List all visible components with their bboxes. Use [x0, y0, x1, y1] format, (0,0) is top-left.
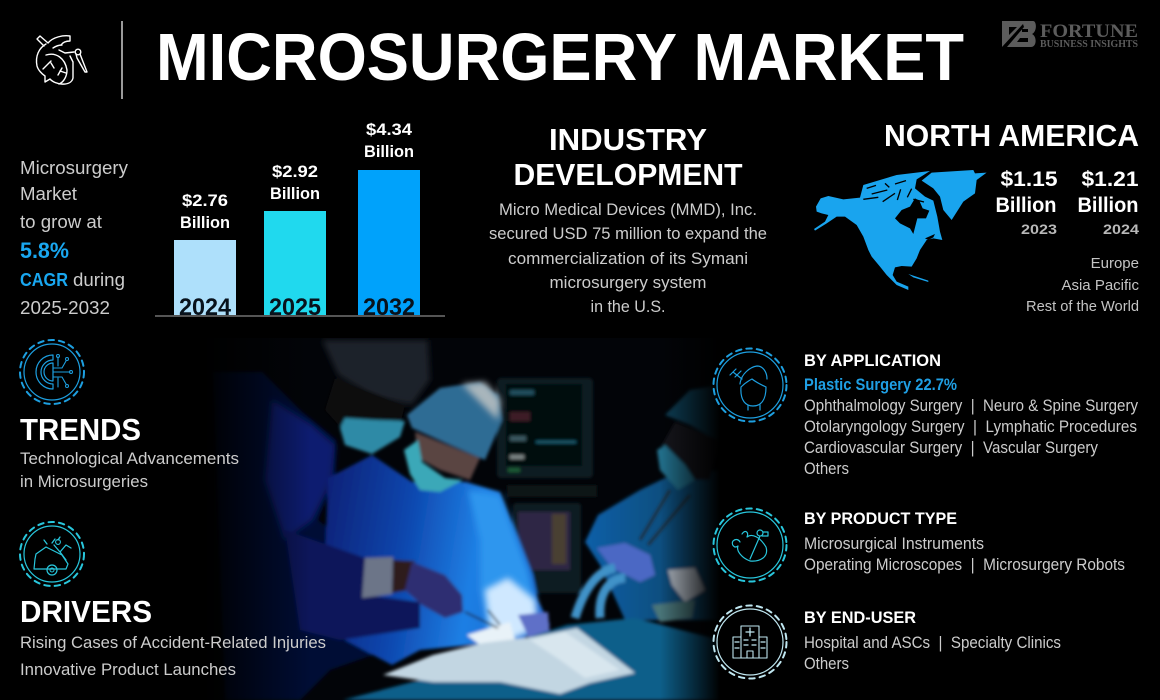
end-user list: Hospital and ASCs | Specialty Clinics: [804, 633, 1061, 652]
white glove: [668, 568, 705, 602]
forearm skin: [392, 560, 415, 593]
north america values: 2024: [1103, 221, 1139, 237]
north america values: Billion: [1078, 194, 1138, 217]
header divider: [121, 21, 123, 99]
icon: application face with syringe: [714, 348, 786, 422]
north america values: $1.15: [1000, 168, 1058, 191]
drivers text: Rising Cases of Accident-Related Injuries: [20, 633, 326, 652]
north america values: [996, 168, 1139, 237]
icon: drivers car accident: [20, 522, 84, 586]
product type list: [804, 534, 1125, 574]
growth text block: [20, 157, 129, 318]
tubes: [575, 568, 625, 618]
growth text block: Microsurgery: [20, 157, 129, 178]
bar chart: 2032: [363, 294, 415, 321]
end-user list: Others: [804, 654, 849, 673]
left surgeon cap: [322, 340, 430, 405]
growth text block: Market: [20, 183, 77, 204]
trends text: [20, 449, 239, 491]
logo: Fortune Business Insights: [1002, 21, 1138, 50]
north america values: Billion: [996, 194, 1056, 217]
industry development: commercialization of its Symani: [508, 249, 748, 268]
logo: Fortune Business Insights: BUSINESS INSIGHTS: [1040, 39, 1138, 50]
instruments: [465, 610, 500, 628]
industry development: INDUSTRY: [549, 122, 707, 157]
growth text block: during: [73, 269, 125, 290]
by product type heading: BY PRODUCT TYPE: [804, 509, 957, 528]
industry development: Micro Medical Devices (MMD), Inc.: [499, 200, 757, 219]
stethoscope: [640, 490, 690, 545]
background photo: surgeons in operating room: [200, 338, 720, 700]
bar chart: $2.76: [182, 191, 228, 210]
other regions: Europe: [1091, 255, 1139, 272]
bar chart: 2024: [179, 294, 232, 321]
nurse cap: [664, 387, 714, 436]
drivers text: [20, 633, 326, 679]
icon: product type heart with instrument: [714, 508, 786, 582]
north america heading: NORTH AMERICA: [884, 118, 1139, 153]
industry development: in the U.S.: [590, 297, 666, 316]
header icon: heart with scalpel: [36, 36, 87, 84]
product type list: Microsurgical Instruments: [804, 534, 984, 553]
growth text block: CAGR: [20, 269, 68, 290]
center surgeon cap: [407, 382, 502, 460]
center surgeon face: [415, 432, 480, 480]
trends text: in Microsurgeries: [20, 472, 148, 491]
bar chart: Billion: [364, 142, 414, 161]
application list: [804, 375, 1138, 478]
left surgeon face: [325, 378, 405, 432]
bright sleeve: [468, 490, 535, 640]
trends heading: TRENDS: [20, 412, 141, 447]
by application heading: BY APPLICATION: [804, 351, 941, 370]
logo: Fortune Business Insights: FORTUNE: [1040, 21, 1138, 42]
trends text: Technological Advancements: [20, 449, 239, 468]
icon: end-user hospital: [714, 606, 786, 678]
map: North America: [814, 170, 987, 290]
drivers text: Innovative Product Launches: [20, 660, 236, 679]
north america values: 2023: [1021, 221, 1057, 237]
by end-user heading: BY END-USER: [804, 608, 916, 627]
drivers heading: DRIVERS: [20, 594, 152, 629]
industry development: [489, 122, 767, 316]
white drape: [383, 628, 635, 694]
other regions: Asia Pacific: [1061, 277, 1139, 294]
title: MICROSURGERY MARKET: [156, 20, 964, 95]
glove: [405, 562, 463, 618]
right fade: [664, 382, 720, 700]
left surgeon body: [220, 372, 373, 700]
application list: Cardiovascular Surgery | Vascular Surgery: [804, 438, 1098, 457]
left surgeon arm: [285, 530, 420, 640]
other regions: [1026, 255, 1139, 315]
bar chart: $2.92: [272, 162, 318, 181]
industry development: DEVELOPMENT: [514, 157, 743, 192]
application list: Others: [804, 459, 849, 478]
left surgeon shoulder: [265, 400, 335, 540]
oxygen mask: [652, 600, 695, 622]
growth text block: 2025-2032: [20, 297, 110, 318]
end-user list: [804, 633, 1061, 673]
nurse face: [662, 422, 710, 480]
patient blue drape: [343, 618, 720, 700]
bar chart: [155, 120, 445, 321]
product type list: Operating Microscopes | Microsurgery Robots: [804, 555, 1125, 574]
bar chart: 2025: [269, 294, 321, 321]
left fade: [210, 370, 302, 700]
icon: trends gear circuit: [20, 340, 84, 404]
application list: Plastic Surgery 22.7%: [804, 375, 957, 394]
monitor upper: [497, 378, 597, 497]
cuff: [362, 557, 393, 598]
nurse glove: [597, 543, 655, 582]
nurse body: [585, 470, 720, 620]
bar chart: Billion: [180, 213, 230, 232]
gauze: [467, 622, 515, 645]
industry development: microsurgery system: [550, 273, 706, 292]
industry development: secured USD 75 million to expand the: [489, 224, 767, 243]
nurse mask: [657, 445, 695, 490]
center surgeon mask: [404, 440, 463, 492]
growth text block: 5.8%: [20, 238, 69, 263]
center surgeon gown: [325, 455, 550, 665]
north america values: $1.21: [1082, 168, 1139, 191]
bar chart: Billion: [270, 184, 320, 203]
center glove: [518, 612, 550, 640]
growth text block: to grow at: [20, 211, 102, 232]
left surgeon mask: [340, 418, 405, 454]
bar chart: $4.34: [366, 120, 413, 139]
other regions: Rest of the World: [1026, 298, 1139, 315]
monitor lower: [513, 503, 581, 593]
